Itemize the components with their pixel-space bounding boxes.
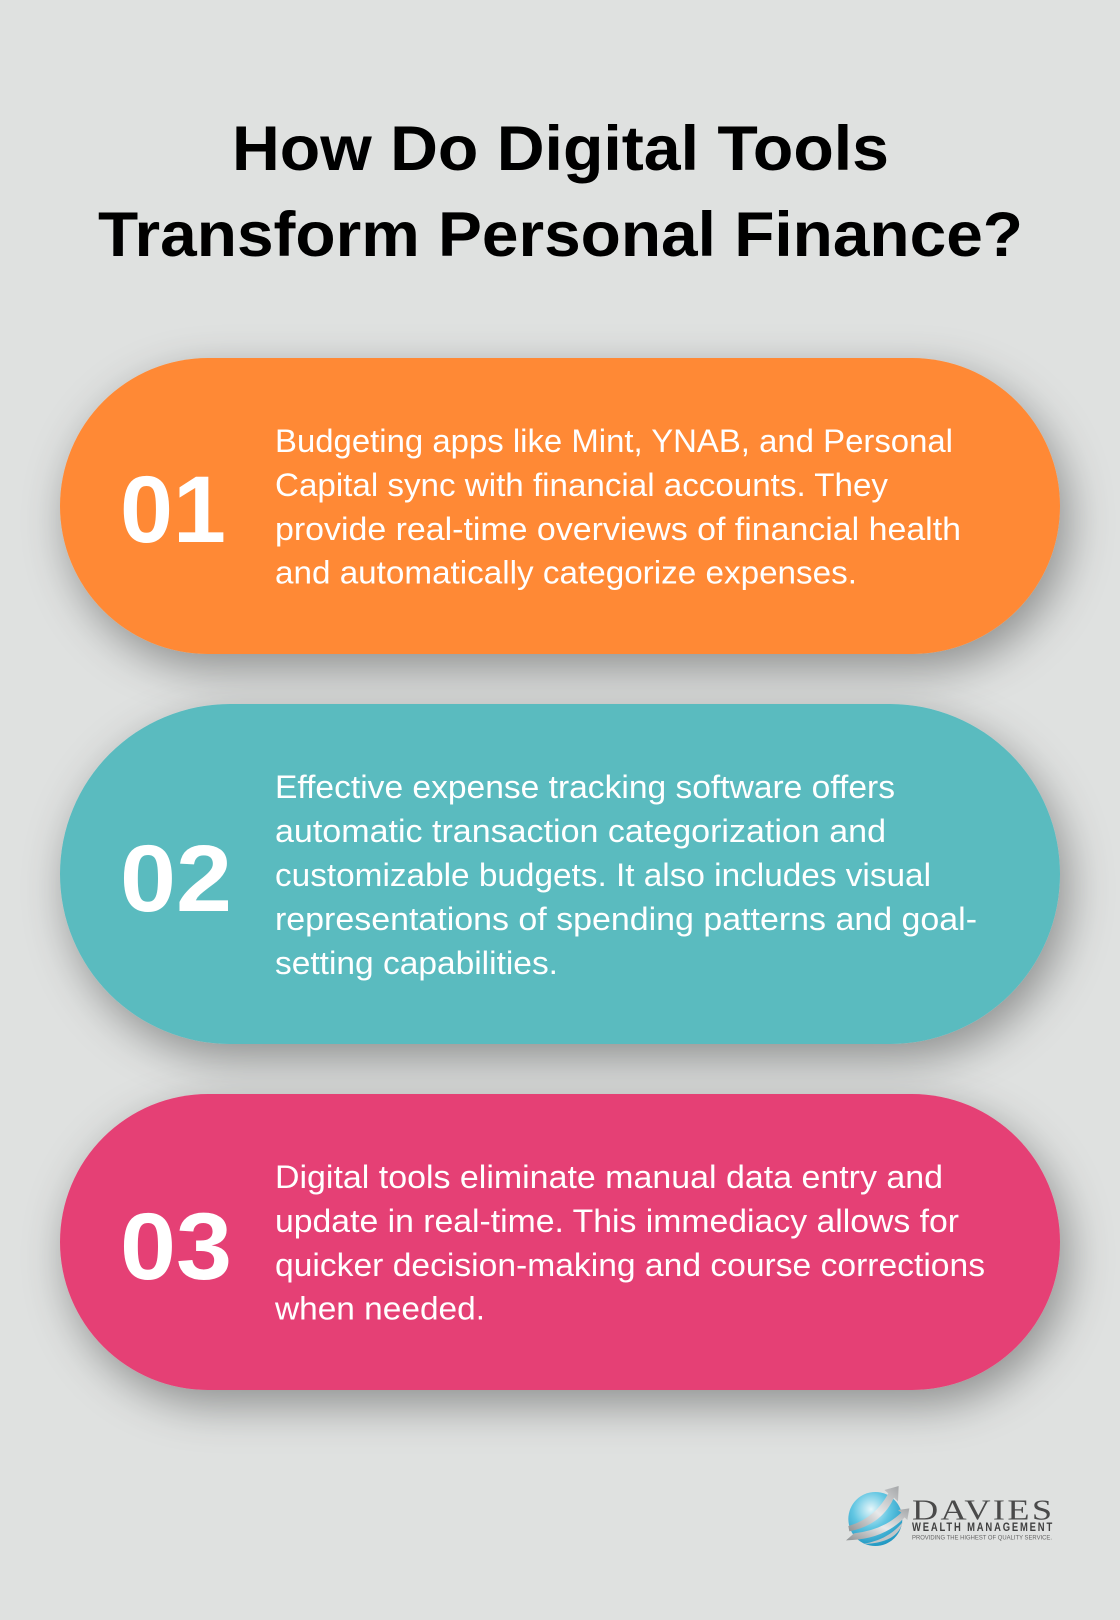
number 02: 02	[120, 826, 232, 932]
text: step 02 description: setting capabilities.	[275, 945, 558, 981]
text: step 03 description: when needed.	[274, 1290, 485, 1326]
text: step 02 description: representations of spending patterns and goal-	[275, 901, 977, 937]
text: step 03 description: quicker decision-making and course corrections	[275, 1247, 985, 1283]
title: How Do Digital Tools	[232, 114, 889, 184]
icon: globe with arrows	[846, 1486, 909, 1546]
number 03: 03	[120, 1194, 232, 1300]
panel: step 02	[60, 704, 1060, 1044]
title: Transform Personal Finance?	[98, 200, 1023, 270]
text: step 01 description: provide real-time overviews of financial health	[275, 511, 961, 547]
logo: Davies Wealth Management	[846, 1486, 1053, 1546]
logo tagline: PROVIDING THE HIGHEST OF QUALITY SERVICE.	[912, 1534, 1052, 1542]
text: step 03 description: Digital tools eliminate manual data entry and	[275, 1159, 943, 1195]
text: step 02 description	[275, 769, 977, 981]
text: step 02 description: Effective expense tracking software offers	[275, 769, 895, 805]
logo subtitle: WEALTH MANAGEMENT	[912, 1521, 1053, 1534]
text: step 01 description: and automatically categorize expenses.	[275, 554, 857, 590]
text: step 02 description: automatic transaction categorization and	[275, 813, 886, 849]
panel: step 03	[60, 1094, 1060, 1390]
number 01: 01	[120, 457, 226, 563]
text: step 01 description	[275, 423, 961, 590]
text: step 03 description: update in real-time. This immediacy allows for	[275, 1203, 959, 1239]
logo wordmark: DAVIES	[912, 1495, 1052, 1527]
panel: step 01	[60, 358, 1060, 654]
text: step 01 description: Budgeting apps like Mint, YNAB, and Personal	[275, 423, 953, 459]
title	[98, 114, 1023, 270]
text: step 03 description	[274, 1159, 985, 1326]
text: step 01 description: Capital sync with financial accounts. They	[275, 467, 889, 503]
text: step 02 description: customizable budgets. It also includes visual	[275, 857, 931, 893]
